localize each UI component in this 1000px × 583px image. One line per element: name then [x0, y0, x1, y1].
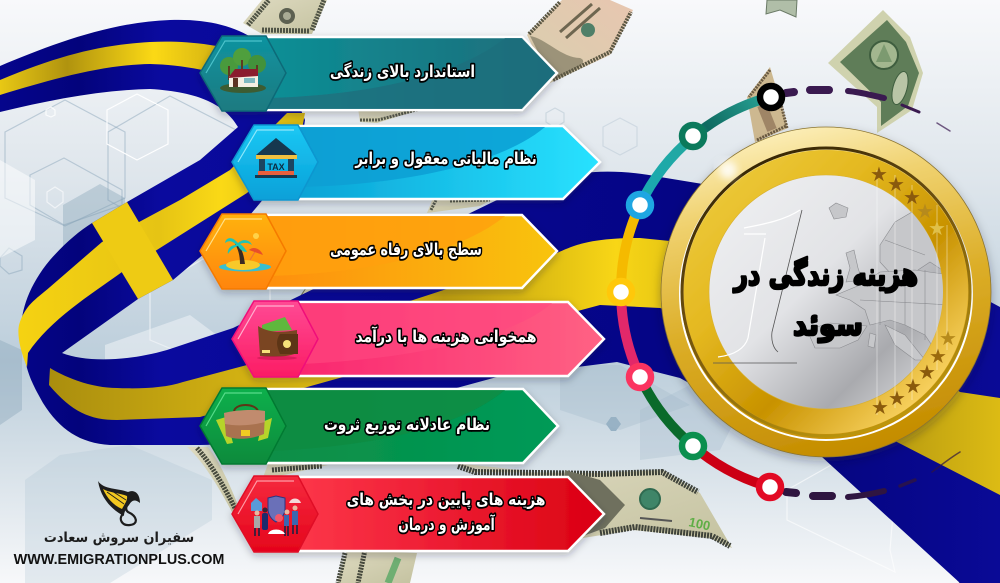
banner 6 label: آموزش و درمان	[398, 514, 496, 535]
banknote: top right dollar	[828, 10, 923, 133]
icon: tax building	[255, 138, 297, 178]
banknote: bottom right corner	[928, 543, 1000, 583]
logo website: WWW.EMIGRATIONPLUS.COM	[14, 552, 224, 568]
icon: house with trees	[220, 48, 266, 93]
banknote: lower left	[187, 447, 328, 520]
coin rim rings	[680, 148, 972, 440]
ribbon yellow upper stripe	[0, 42, 285, 100]
icon: briefcase with cash	[216, 405, 272, 444]
icon: palm island	[219, 233, 271, 272]
coin	[661, 127, 991, 457]
coin glare	[719, 161, 737, 179]
banknote: top left	[243, 0, 327, 34]
banner 3 label: سطح بالای رفاه عمومی	[330, 240, 482, 259]
logo persian name: سفیران سروش سعادت	[44, 531, 194, 546]
coin stars: ★	[916, 199, 934, 223]
banknote: between third and fourth banners	[300, 288, 320, 302]
banner 6	[232, 476, 604, 552]
banner 5	[200, 388, 558, 464]
ribbon cross bar	[92, 202, 173, 299]
banknote: small top	[766, 0, 797, 17]
banner 4 label: همخوانی هزینه ها با درآمد	[356, 326, 536, 346]
coin title	[732, 256, 918, 342]
background hexagon pattern	[0, 94, 895, 572]
coin numeral one	[713, 210, 802, 363]
banknote: behind top node	[747, 67, 788, 142]
coin stars: ★	[904, 374, 922, 398]
icon: insured people	[251, 496, 301, 536]
dashed arc bottom	[786, 452, 960, 497]
banner 6 label: هزینه های پایین در بخش های	[347, 490, 545, 510]
coin stars: ★	[871, 395, 889, 419]
coin stars: ★	[888, 386, 906, 410]
coin stars: ★	[929, 344, 947, 368]
coin silver centre	[709, 175, 943, 409]
banner 1	[200, 36, 557, 111]
banner 6 label	[347, 490, 545, 535]
coin stars: ★	[939, 326, 957, 350]
logo mark: winged S	[98, 481, 140, 525]
coin vertical glints	[877, 170, 947, 415]
banner 2 label: نظام مالیاتی معقول و برابر	[354, 149, 537, 168]
coin stars	[870, 162, 957, 419]
banknote: under first banner	[358, 108, 425, 123]
banknote: under second banner	[427, 198, 495, 213]
coin stars: ★	[870, 162, 888, 186]
background hexagon blocks	[0, 160, 740, 583]
banner 5 label: نظام عادلانه توزیع ثروت	[324, 415, 490, 434]
coin stars: ★	[928, 216, 946, 240]
coin title: سوئد	[793, 306, 863, 342]
timeline nodes	[610, 86, 782, 498]
coin gold ring	[684, 150, 968, 434]
banner 2	[232, 125, 600, 200]
banner 4	[232, 301, 604, 377]
banknote: top centre	[527, 0, 633, 83]
banner 1 label: استاندارد بالای زندگی	[330, 62, 475, 81]
coin stars: ★	[887, 172, 905, 196]
coin map of europe	[807, 203, 950, 360]
timeline arc	[621, 90, 960, 497]
coin title: هزینه زندگی در	[732, 256, 918, 293]
icon: wallet	[257, 317, 298, 360]
icon: tax building: TAX	[267, 162, 285, 172]
dashed arc top	[786, 90, 950, 131]
ribbon yellow lower stripe	[49, 238, 1000, 495]
logo	[14, 481, 224, 568]
banknote: bottom right large	[455, 463, 732, 548]
coin stars: ★	[918, 360, 936, 384]
banner 3	[200, 214, 557, 289]
banknote: bottom right large: 100	[687, 514, 712, 533]
ribbon yellow diagonal stripe	[18, 113, 305, 367]
banknote: bottom centre	[337, 550, 417, 583]
coin stars: ★	[903, 185, 921, 209]
